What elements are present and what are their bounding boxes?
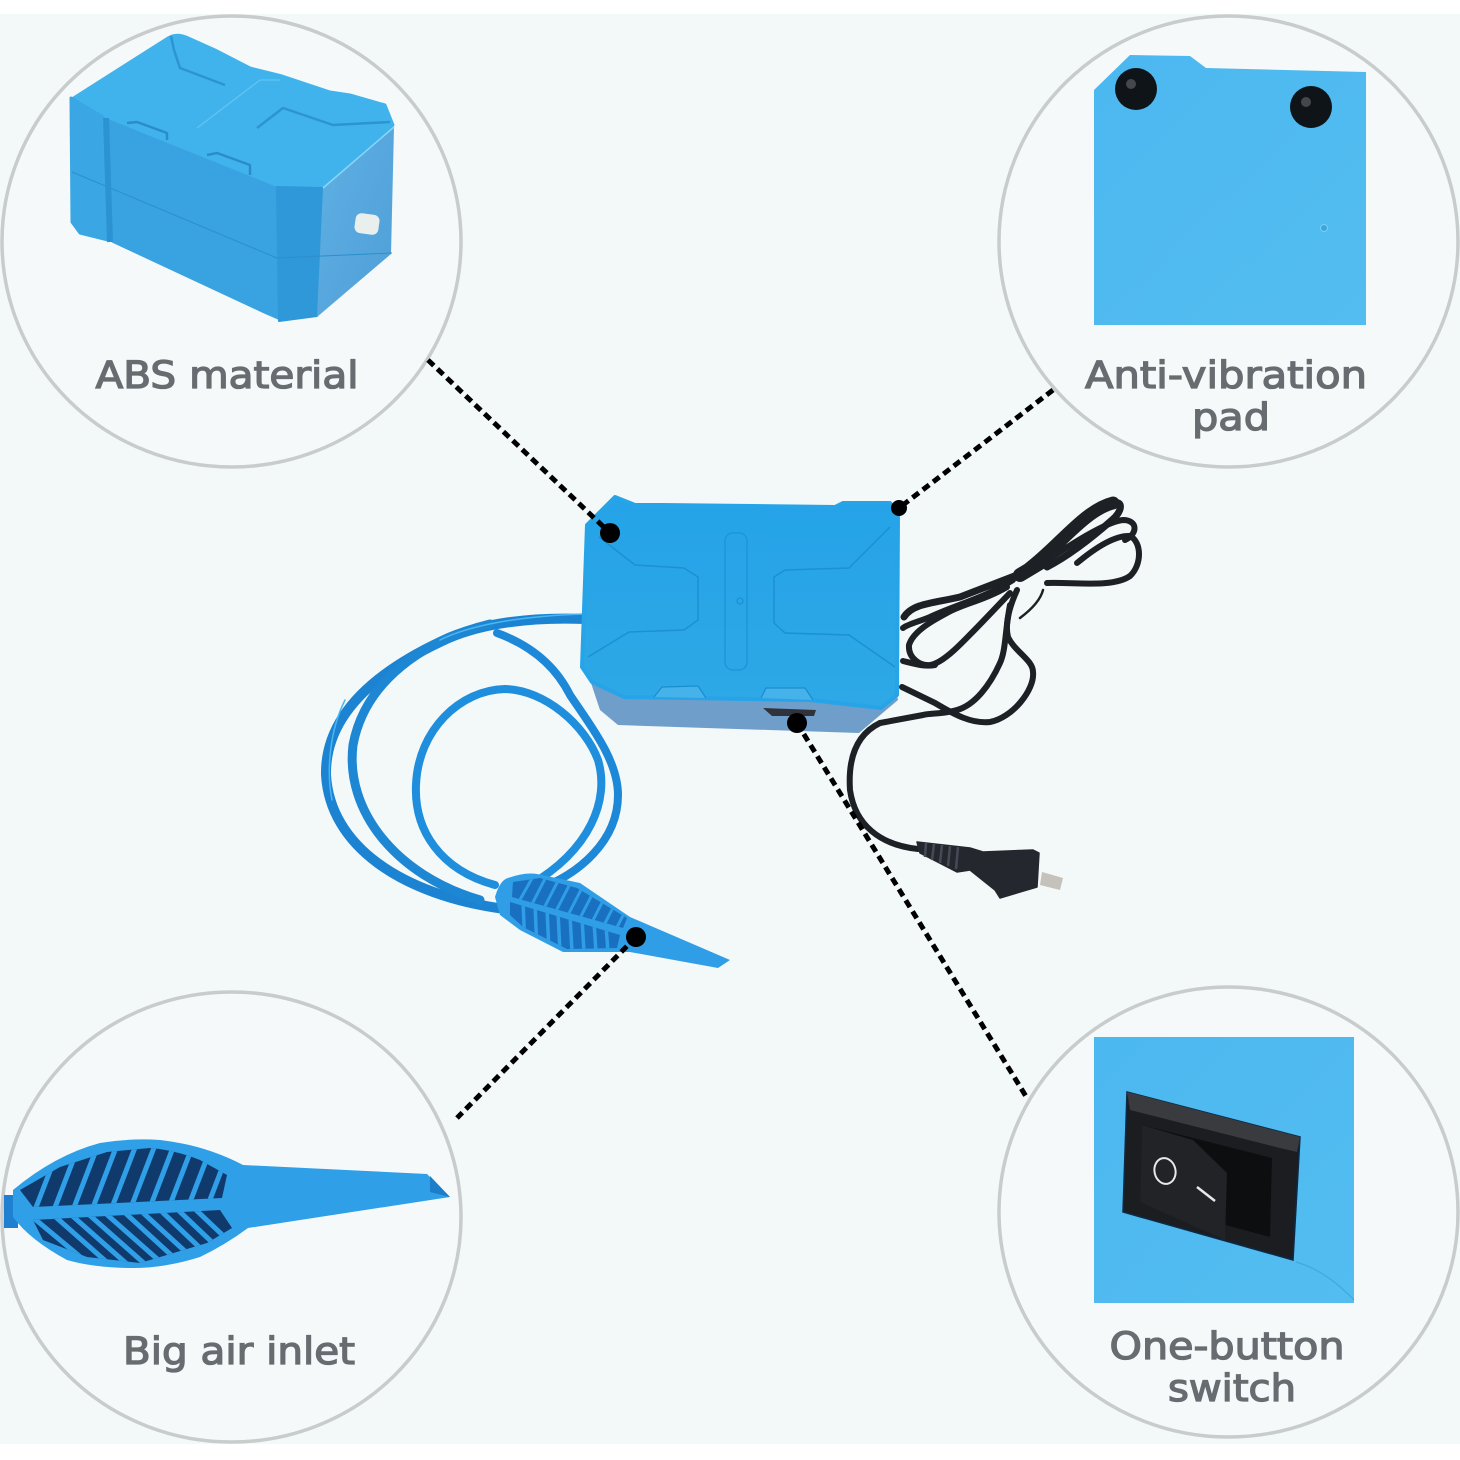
plug <box>917 842 1063 898</box>
icon: air nozzle <box>354 212 380 236</box>
callout line: Big air inlet <box>457 937 636 1118</box>
label: ABS material: ABS material <box>96 354 358 397</box>
label: Anti-vibration pad: Anti-vibration <box>1085 354 1367 397</box>
icon: rocker switch on housing <box>1094 1037 1354 1303</box>
power cord <box>850 503 1139 849</box>
panel: One-button switch <box>999 987 1458 1437</box>
icon: pump housing render <box>71 35 394 321</box>
panel: Anti-vibration pad: pad <box>1192 396 1270 439</box>
callout dot: inlet <box>626 927 646 947</box>
panel: Anti-vibration pad <box>999 16 1458 467</box>
pump housing <box>582 497 898 733</box>
air inlet <box>495 873 730 968</box>
label: Big air inlet: Big air inlet <box>123 1330 355 1373</box>
callout line: Anti-vibration pad <box>899 390 1053 508</box>
icon: pump base with pads <box>1094 55 1366 325</box>
callout line: One-button switch <box>797 723 1027 1098</box>
panel: ABS material <box>2 16 461 467</box>
callout dot: switch <box>787 713 807 733</box>
pump product <box>326 497 1139 968</box>
callout dot: base <box>891 500 907 516</box>
callout line: ABS material <box>428 360 610 533</box>
panel: Big air inlet <box>2 992 461 1442</box>
switch side view <box>763 708 816 716</box>
label: One-button switch: One-button <box>1110 1325 1344 1368</box>
callout dot: housing <box>600 523 620 543</box>
panel: One-button switch: switch <box>1168 1367 1296 1410</box>
air tubing <box>326 614 618 909</box>
icon: leaf-shaped air inlet <box>4 1139 450 1268</box>
